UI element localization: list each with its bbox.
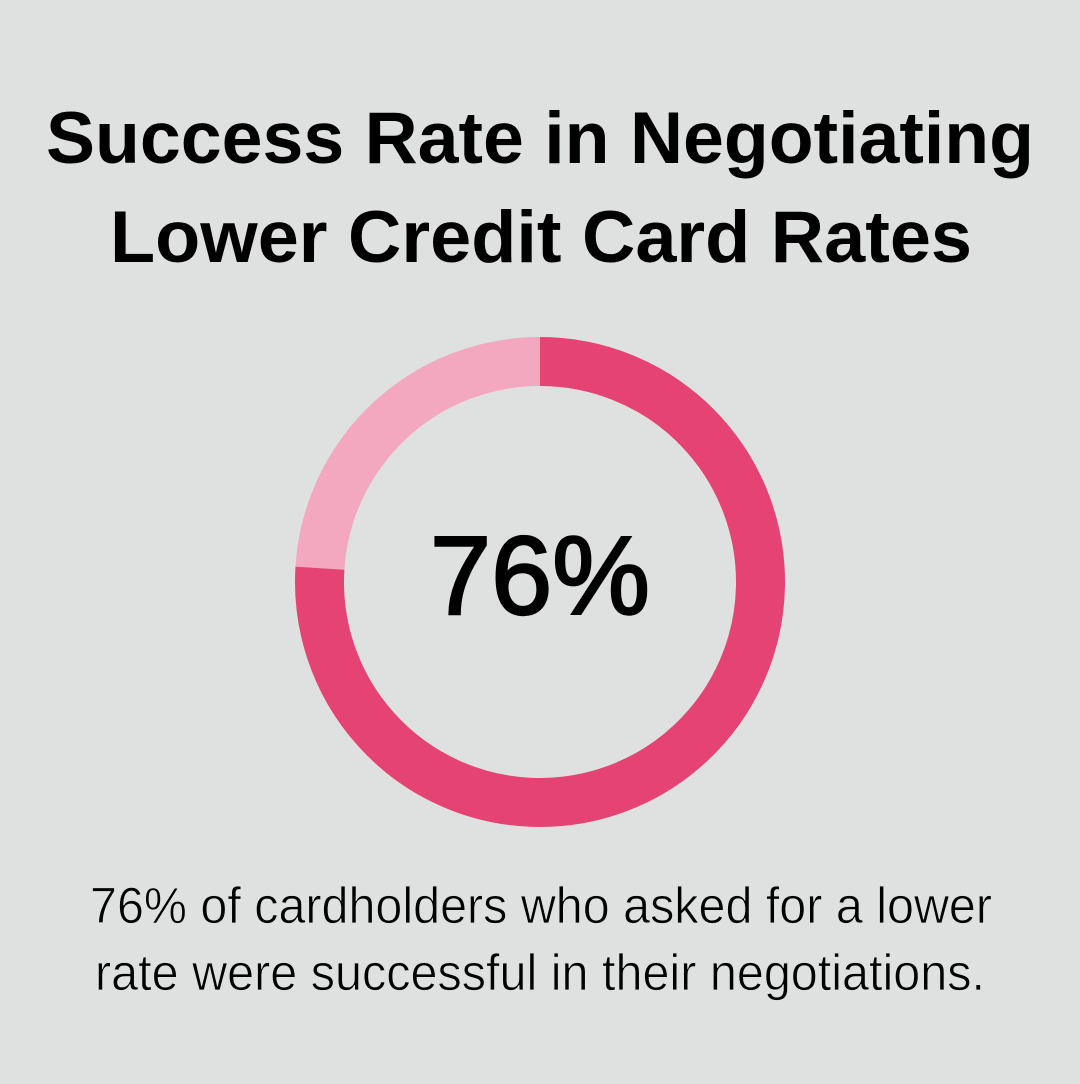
- description text: rate were successful in their negotiations.: [95, 944, 985, 1001]
- title: Lower Credit Card Rates: [110, 197, 972, 278]
- center value: 76%: [430, 514, 650, 638]
- title: [46, 98, 1034, 278]
- donut chart: 76%: [320, 361, 761, 802]
- description text: 76% of cardholders who asked for a lower: [90, 877, 992, 934]
- title: Success Rate in Negotiating: [46, 98, 1034, 179]
- description text: [90, 877, 992, 1001]
